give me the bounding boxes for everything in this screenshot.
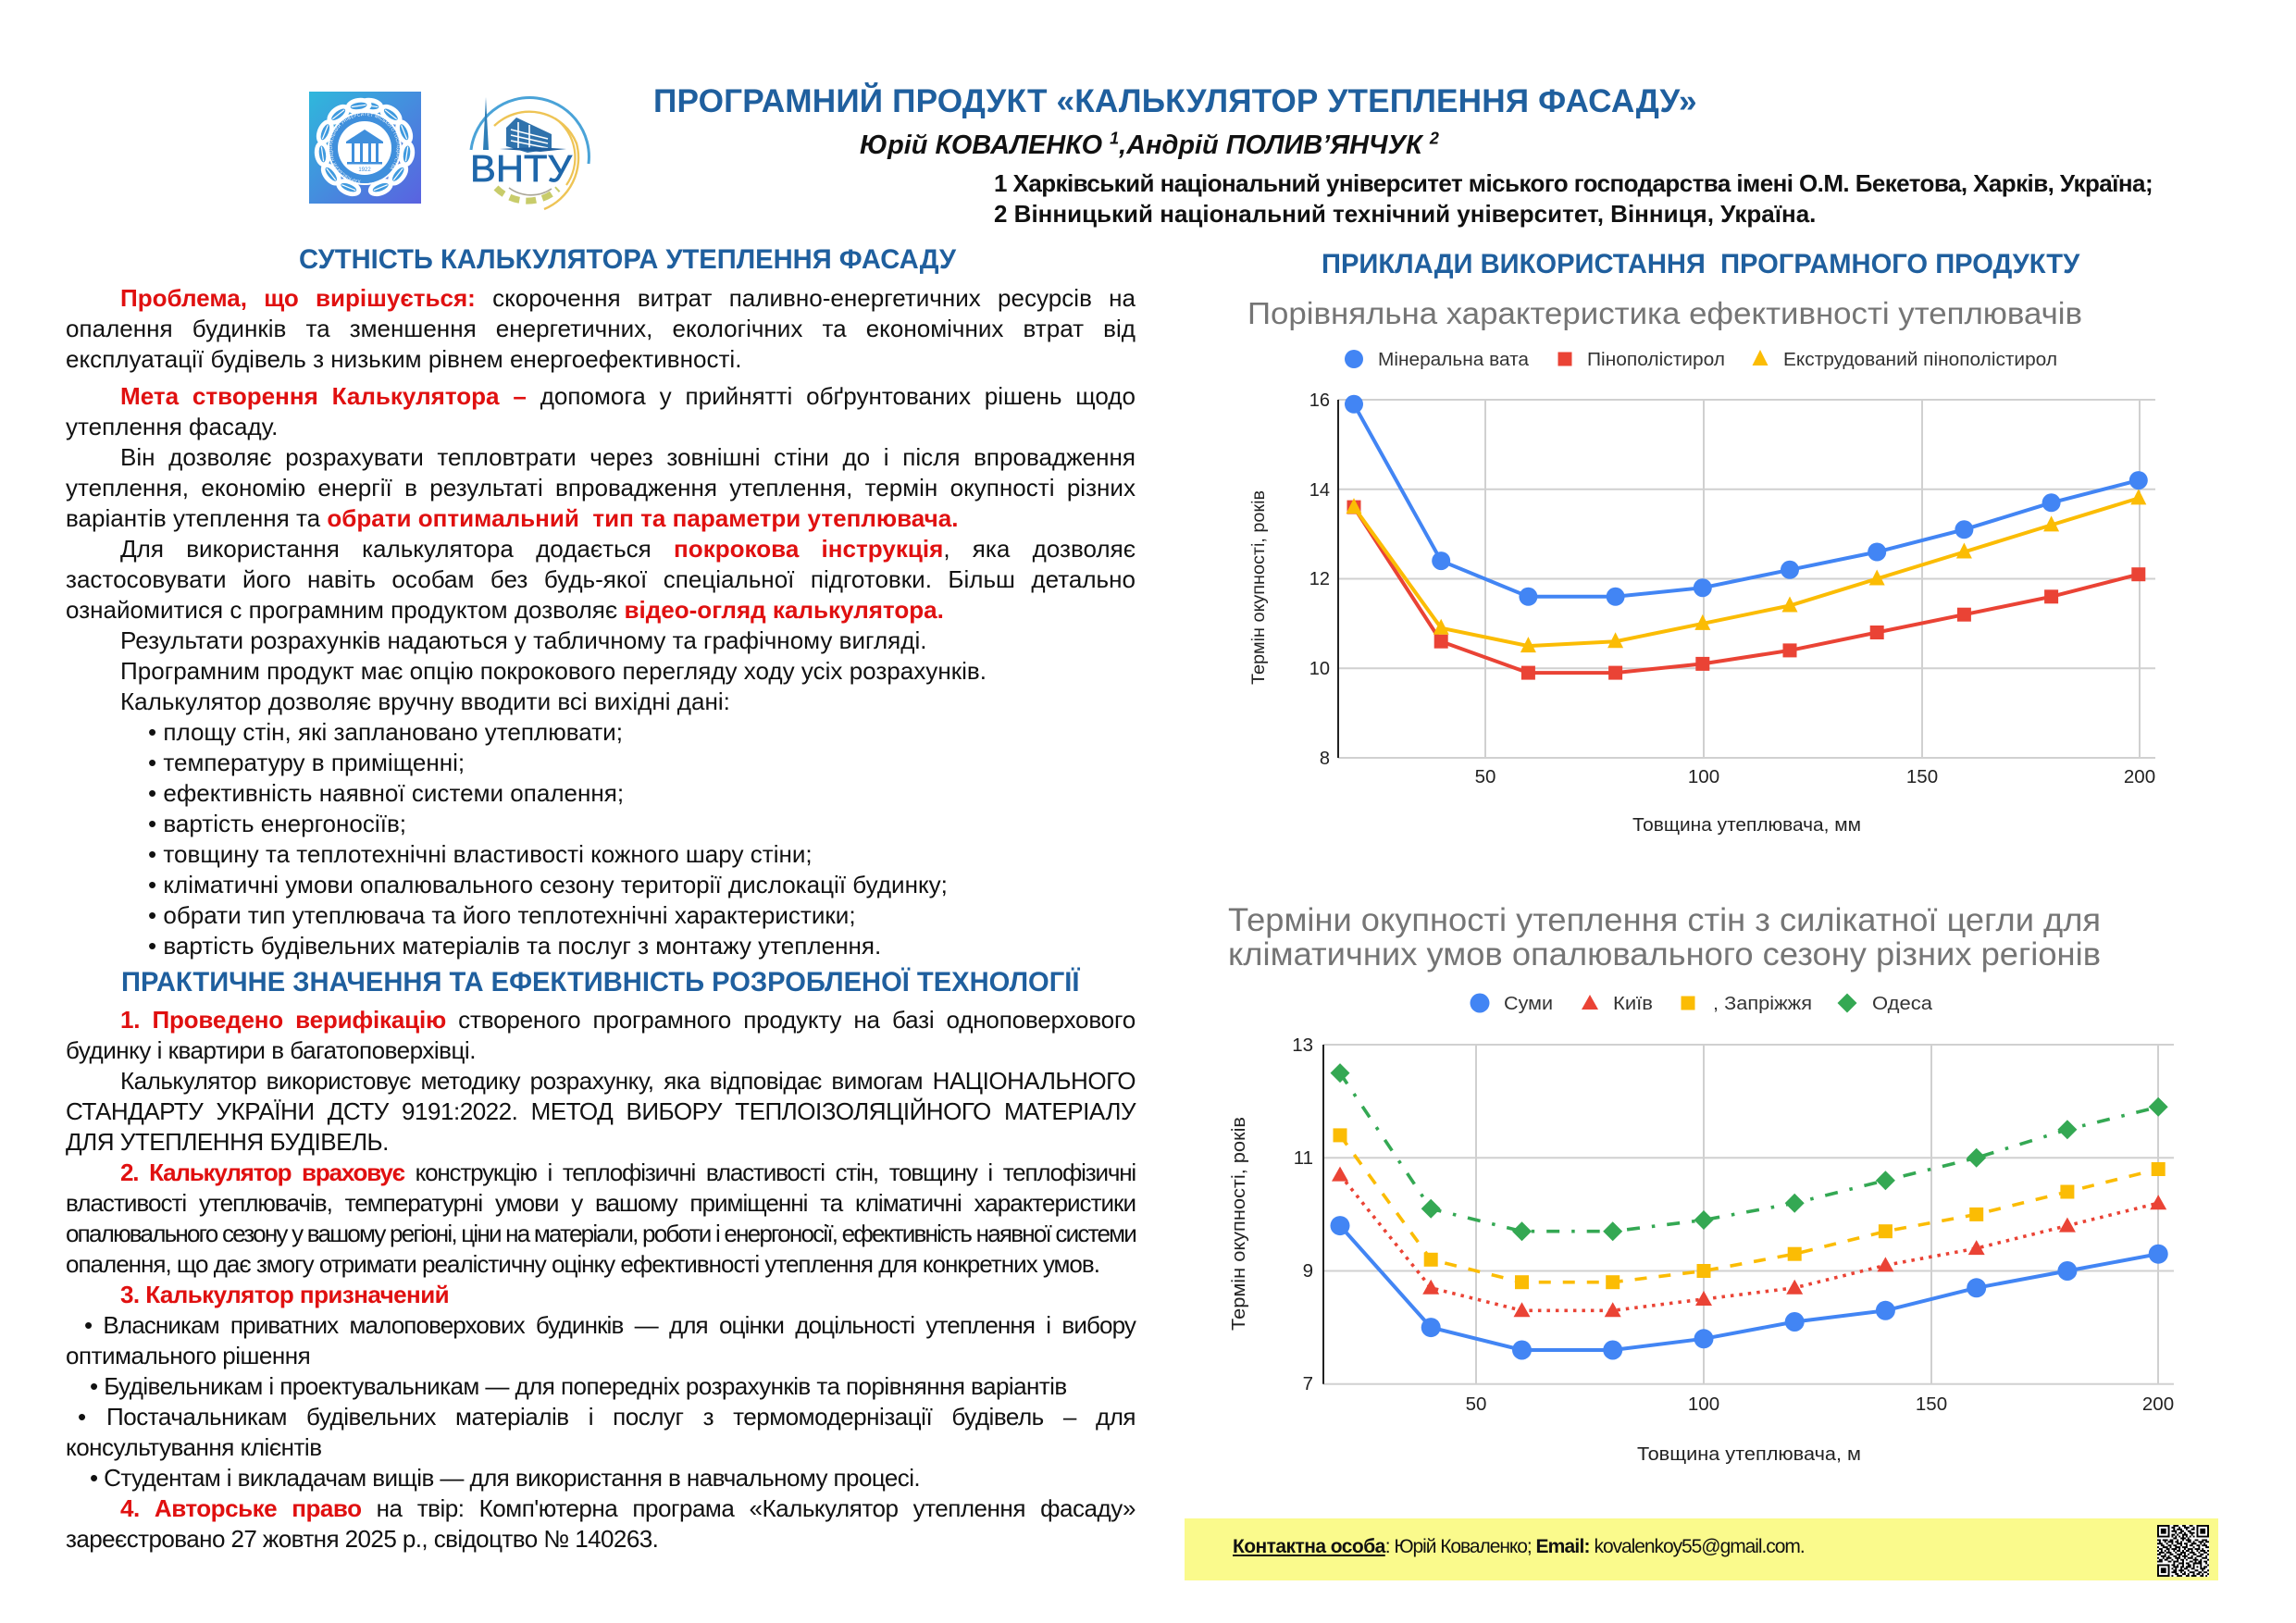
text block: goal and features: утеплення, економію енергії в результаті впровадження утеплення, термін окупності різних [66, 474, 1136, 502]
y axis title: Термін окупності, років [1229, 1117, 1249, 1331]
y axis labels: 16 [1309, 390, 1330, 411]
logo: VNTU [470, 96, 590, 210]
text block: problem: опалення будинків та зменшення енергетичних, екологічних та економічних втрат від [66, 315, 1136, 342]
series: mineral wool [1345, 395, 2148, 606]
text block: practical value: будинку і квартири в багатоповерхівці. [66, 1036, 476, 1064]
y axis labels [1292, 1035, 1313, 1394]
authors: Юрій КОВАЛЕНКО 1,Андрій ПОЛИВ’ЯНЧУК 2 [860, 129, 1439, 160]
text block: practical value: 3. Калькулятор призначений [120, 1281, 449, 1308]
legend [1470, 994, 1933, 1014]
text block: practical value: зареєстровано 27 жовтня 2025 р., свідоцтво № 140263. [66, 1525, 658, 1553]
text block: goal and features: ознайомитися с програмним продуктом дозволяє відео-огляд калькулятора. [66, 596, 944, 624]
x axis labels: 150 [1906, 766, 1938, 787]
chart: payback periods by region [1228, 902, 2174, 1465]
text block: goal and features: • вартість енергоносіїв; [148, 810, 406, 837]
x axis labels [1466, 1394, 2174, 1415]
wordmark: ВНТУ [470, 147, 573, 190]
text block: goal and features: Для використання калькулятора додається покрокова інструкція, яка дозволяє [120, 535, 1136, 563]
text block: goal and features: • вартість будівельних матеріалів та послуг з монтажу утеплення. [148, 932, 881, 960]
y axis labels: 12 [1309, 569, 1330, 589]
text block: practical value: • Студентам і викладачам вищів — для використання в навчальному процесі. [90, 1464, 920, 1492]
series: extruded polystyrene [1346, 489, 2146, 652]
x axis labels: 200 [2124, 766, 2155, 787]
x axis title: Товщина утеплювача, мм [1632, 815, 1861, 836]
logo: Kharkiv university emblem: 1922 [358, 167, 371, 173]
legend [1345, 350, 2057, 370]
series: Odesa [1331, 1063, 2168, 1241]
chart title: кліматичних умов опалювального сезону різних регіонів [1228, 936, 2101, 973]
heading: practical value: ПРАКТИЧНЕ ЗНАЧЕННЯ ТА ЕФЕКТИВНІСТЬ РОЗРОБЛЕНОЇ ТЕХНОЛОГІЇ [121, 968, 1079, 997]
text block: practical value: 2. Калькулятор враховує конструкцію і теплофізичні властивості стін, товщину і теплофізичні [120, 1158, 1136, 1186]
text block: practical value: Постачальникам будівельних матеріалів і послуг з термомодернізації будівель – для [106, 1403, 1136, 1431]
y axis labels: 9 [1303, 1260, 1313, 1282]
contact text: Контактна особа: Юрій Коваленко; Email: kovalenkoy55@gmail.com. [1233, 1536, 1805, 1557]
x axis labels [1475, 766, 2155, 787]
affiliations [994, 169, 2153, 228]
text block: goal and features: Він дозволяє розрахувати тепловтрати через зовнішні стіни до і після впровадження [120, 443, 1136, 471]
y axis labels: 10 [1309, 659, 1330, 679]
y axis labels: 7 [1303, 1373, 1313, 1394]
QR code [2157, 1525, 2209, 1577]
text block: practical value: оптимального рішення [66, 1342, 310, 1369]
affiliations: 1 Харківський національний університет міського господарства імені О.М. Бекетова, Харків, Україна; [994, 169, 2153, 197]
y axis labels: 11 [1294, 1147, 1313, 1169]
text block: practical value: СТАНДАРТУ УКРАЇНИ ДСТУ 9191:2022. МЕТОД ВИБОРУ ТЕПЛОІЗОЛЯЦІЙНОГО МАТЕРІАЛУ [66, 1097, 1136, 1125]
title: ПРОГРАМНИЙ ПРОДУКТ «КАЛЬКУЛЯТОР УТЕПЛЕННЯ ФАСАДУ» [653, 83, 1697, 119]
text block: practical value: властивості утеплювачів, температурні умови у вашому приміщенні та кліматичні характеристики [66, 1189, 1136, 1217]
text block: goal and features: • температуру в приміщенні; [148, 749, 465, 776]
text block: goal and features: • товщину та теплотехнічні властивості кожного шару стіни; [148, 840, 813, 868]
legend: Одеса [1872, 994, 1933, 1014]
x axis labels: 150 [1916, 1394, 1947, 1415]
x axis labels: 50 [1466, 1394, 1486, 1415]
chart title: Порівняльна характеристика ефективності утеплювачів [1247, 296, 2082, 330]
x axis labels: 100 [1688, 1394, 1719, 1415]
y axis labels: 8 [1320, 749, 1330, 769]
text block: problem [66, 284, 1136, 373]
affiliations: 2 Вінницький національний технічний університет, Вінниця, Україна. [994, 200, 1816, 228]
text block: practical value: опалення, що дає змогу отримати реалістичну оцінку ефективності утеплення для конкретних умов. [66, 1250, 1099, 1278]
text block: goal and features: утеплення фасаду. [66, 413, 278, 440]
text block: problem: Проблема, що вирішується: скорочення витрат паливно-енергетичних ресурсів на [120, 284, 1136, 312]
legend: Київ [1613, 994, 1653, 1014]
heading: usage examples: ПРИКЛАДИ ВИКОРИСТАННЯ ПРОГРАМНОГО ПРОДУКТУ [1322, 250, 2079, 279]
legend: Мінеральна вата [1378, 350, 1530, 370]
x axis labels: 100 [1688, 766, 1719, 787]
heading: essence of calculator: СУТНІСТЬ КАЛЬКУЛЯТОРА УТЕПЛЕННЯ ФАСАДУ [299, 245, 956, 275]
text block: goal and features: • обрати тип утеплювача та його теплотехнічні характеристики; [148, 901, 856, 929]
text block: practical value [66, 1006, 1136, 1553]
chart title [1228, 902, 2101, 973]
text block: goal and features: Результати розрахунків надаються у табличному та графічному вигляді. [120, 626, 926, 654]
series: Sumy [1331, 1216, 2168, 1360]
text block: problem: експлуатації будівель з низьким рівнем енергоефективності. [66, 345, 741, 373]
logo: Kharkiv university emblem [309, 92, 421, 204]
text block: goal and features [66, 382, 1136, 960]
x axis labels: 50 [1475, 766, 1496, 787]
text block: practical value: ДЛЯ УТЕПЛЕННЯ БУДІВЕЛЬ. [66, 1128, 389, 1156]
contact bar [1185, 1518, 2218, 1580]
text block: goal and features: Калькулятор дозволяє вручну вводити всі вихідні дані: [120, 688, 730, 715]
text block: goal and features: • кліматичні умови опалювального сезону території дислокації будинку; [148, 871, 948, 898]
chart: insulation efficiency comparison [1247, 296, 2155, 836]
x axis labels: 200 [2142, 1394, 2174, 1415]
y axis labels [1309, 390, 1330, 769]
chart title: Терміни окупності утеплення стін з силікатної цегли для [1228, 902, 2101, 938]
legend: Екструдований пінополістирол [1783, 350, 2057, 370]
legend: , Запріжжя [1713, 994, 1812, 1014]
logo: Kharkiv university emblem: ХАРКІВСЬКИЙ НАЦІОНАЛЬНИЙ УНІВЕРСИТЕТ МІСЬКОГО ГОСПОДАРСТВА [329, 113, 400, 183]
grid [1338, 400, 2155, 758]
text block: practical value: 4. Авторське право на твір: Комп'ютерна програма «Калькулятор утеплення фасаду» [120, 1494, 1136, 1522]
text block: practical value: Калькулятор використовує методику розрахунку, яка відповідає вимогам НАЦІОНАЛЬНОГО [120, 1067, 1136, 1095]
y axis title: Термін окупності, років [1249, 490, 1269, 685]
legend: Суми [1504, 994, 1553, 1014]
text block: goal and features: • ефективність наявної системи опалення; [148, 779, 624, 807]
text block: practical value: • Будівельникам і проектувальникам — для попередніх розрахунків та порівняння варіантів [90, 1372, 1067, 1400]
text block: goal and features: застосовувати його навіть особам без будь-якої спеціальної підготовки. Більш детально [66, 565, 1136, 593]
series: Kyiv [1332, 1167, 2166, 1317]
text block: practical value: 1. Проведено верифікацію створеного програмного продукту на базі одноповерхового [120, 1006, 1136, 1034]
text block: goal and features: варіантів утеплення та обрати оптимальний тип та параметри утеплювача. [66, 504, 958, 532]
text block: goal and features: Мета створення Калькулятора – допомога у прийнятті обґрунтованих рішень щодо [120, 382, 1136, 410]
text block: goal and features: • площу стін, які заплановано утеплювати; [148, 718, 623, 746]
text block: practical value: опалювального сезону у вашому регіоні, ціни на матеріали, роботи і енергоносії, ефективність наявної системи [66, 1220, 1136, 1247]
grid [1323, 1045, 2174, 1384]
text block: goal and features: Програмним продукт має опцію покрокового перегляду ходу усіх розрахунків. [120, 657, 987, 685]
text block: practical value: консультування клієнтів [66, 1433, 322, 1461]
series: Zaporizhzhia [1333, 1128, 2166, 1289]
series: foam polystyrene [1347, 501, 2145, 680]
legend: Пінополістирол [1587, 350, 1725, 370]
y axis labels: 14 [1309, 480, 1330, 501]
text block: practical value: • [78, 1403, 86, 1431]
x axis title: Товщина утеплювача, м [1637, 1444, 1861, 1465]
text block: practical value: • Власникам приватних малоповерхових будинків — для оцінки доцільності утеплення і вибору [84, 1311, 1136, 1339]
y axis labels: 13 [1292, 1035, 1313, 1056]
